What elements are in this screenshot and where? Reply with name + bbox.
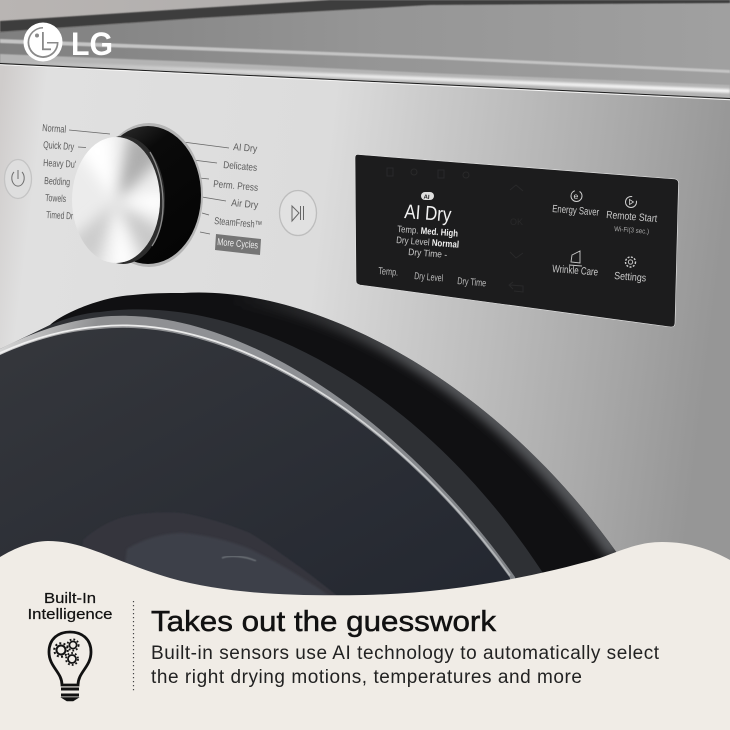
icon: light bulb with gears [49, 632, 91, 700]
more cycles tag: More Cycles [217, 237, 259, 252]
cycle labels, left of dial [42, 123, 110, 222]
body copy [151, 643, 660, 688]
door glass [0, 328, 510, 610]
cycle dial [70, 123, 203, 270]
chrome collar [95, 123, 203, 267]
remote start [606, 196, 658, 236]
cycle labels, right of dial: Delicates [223, 160, 258, 174]
selected cycle readout: AI [423, 195, 430, 201]
brushed knob face [72, 137, 160, 263]
cycle labels, left of dial: Towels [45, 193, 66, 205]
LG logo: LG [71, 26, 113, 62]
chrome highlight [0, 325, 510, 576]
settings [614, 257, 647, 285]
display panel [355, 154, 679, 327]
top of the dryer: lid and trim strips [0, 0, 730, 100]
cycle labels, left of dial: Timed Dr [46, 210, 74, 222]
power button [4, 160, 32, 198]
cycle labels, right of dial: SteamFresh™ [214, 216, 263, 231]
energy saver: e [574, 191, 578, 201]
door inner band [0, 309, 560, 610]
more cycles tag [215, 234, 261, 255]
selected cycle readout: Temp. Med. High [397, 224, 459, 240]
dark cavity [95, 126, 201, 264]
inner drum window [80, 512, 345, 602]
cycle labels, right of dial: Perm. Press [213, 179, 259, 194]
knob cylinder [81, 136, 165, 264]
wrinkle care: Wrinkle Care [552, 263, 599, 279]
remote start: Remote Start [606, 209, 658, 225]
dim status icons and navigation keys: OK [510, 217, 523, 227]
selected cycle readout [396, 192, 459, 261]
dim status icons and navigation keys [387, 168, 523, 292]
start pause button [280, 190, 316, 236]
cycle labels, right of dial: Air Dry [231, 198, 259, 211]
energy saver: Energy Saver [552, 203, 600, 219]
cycle labels, left of dial: Normal [42, 123, 66, 136]
remote start: Wi-Fi(3 sec.) [614, 226, 649, 236]
badge title: Intelligence [28, 606, 112, 623]
cycle labels, left of dial: Heavy Du' [43, 158, 76, 171]
badge title: Built-In [44, 590, 96, 607]
cycle labels, left of dial: Quick Dry [43, 140, 74, 153]
brushed steel control panel [0, 65, 730, 620]
body copy: Built-in sensors use AI technology to automatically select [151, 643, 660, 664]
selected cycle readout: AI Dry [404, 201, 452, 227]
body copy: the right drying motions, temperatures and more [151, 667, 582, 688]
settings: Settings [614, 270, 647, 285]
selected cycle readout: Dry Time - [408, 247, 447, 261]
chrome ring [0, 316, 520, 610]
badge title [28, 590, 112, 623]
setting labels: Dry Level [414, 271, 444, 285]
setting labels: Dry Time [457, 276, 487, 290]
door outer rim [35, 292, 616, 572]
headline: Takes out the guesswork [151, 606, 497, 638]
setting labels [378, 266, 487, 290]
dotted divider [132, 601, 134, 692]
energy saver [552, 190, 600, 219]
wrinkle care [552, 251, 599, 279]
cycle labels, left of dial: Bedding [44, 176, 70, 188]
setting labels: Temp. [378, 266, 399, 279]
cycle labels, right of dial [183, 142, 263, 234]
selected cycle readout: Dry Level Normal [396, 235, 459, 251]
dryer door [0, 292, 616, 596]
cycle labels, right of dial: AI Dry [233, 142, 258, 155]
cream caption band [0, 541, 730, 730]
LG logo [24, 22, 113, 62]
